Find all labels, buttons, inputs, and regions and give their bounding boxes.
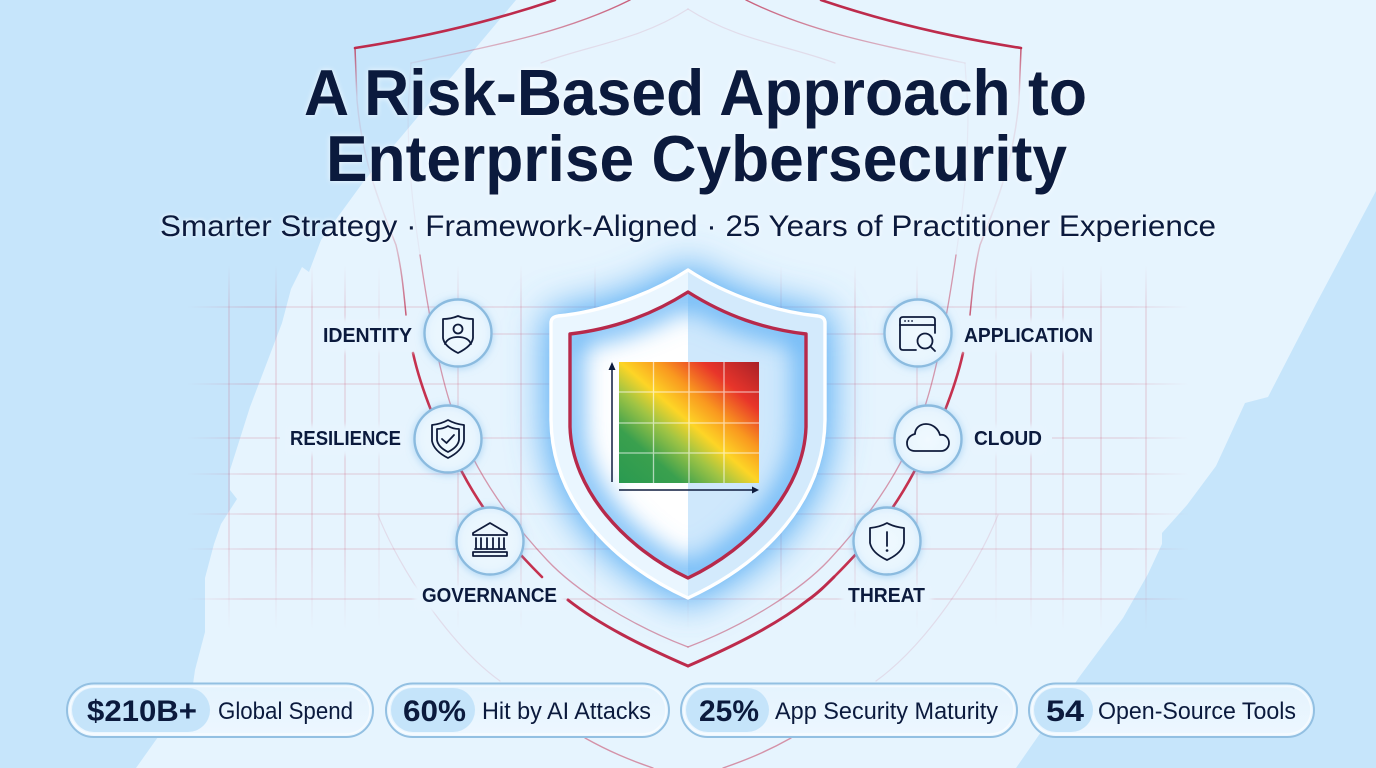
stat pill: open-source tools xyxy=(1029,684,1314,737)
stat pill: AI attacks: 60% xyxy=(403,695,466,728)
risk grid lines xyxy=(187,265,1189,640)
stat pill: app security maturity xyxy=(681,684,1017,737)
label: threat: THREAT xyxy=(848,585,925,607)
title xyxy=(304,56,1087,195)
icon: government building xyxy=(473,523,507,556)
node: cloud xyxy=(894,406,962,472)
stat pill: open-source tools: Open-Source Tools xyxy=(1098,698,1296,725)
node: governance xyxy=(456,508,524,574)
stat pill: global spend: Global Spend xyxy=(218,698,353,725)
subtitle: Smarter Strategy · Framework-Aligned · 25 Years of Practitioner Experience xyxy=(160,210,1216,243)
shield outer band xyxy=(545,265,831,605)
heatmap axes xyxy=(608,362,759,494)
stat pill: AI attacks: Hit by AI Attacks xyxy=(482,698,651,725)
shield inner panel xyxy=(565,288,811,583)
shield white edge xyxy=(551,270,825,598)
background: right blue shape xyxy=(1016,191,1376,768)
stat pill: open-source tools: 54 xyxy=(1046,695,1084,728)
node: resilience xyxy=(414,406,482,472)
stat pill: app security maturity: 25% xyxy=(699,695,759,728)
title: A Risk-Based Approach to xyxy=(304,56,1087,129)
icon: resilience shield with check xyxy=(432,420,464,458)
icon: alert shield xyxy=(870,523,904,560)
node: application xyxy=(884,300,952,366)
shield red border xyxy=(570,292,806,578)
icon: identity shield xyxy=(443,316,473,353)
icon: cloud xyxy=(907,424,949,451)
background shield outlines: left half xyxy=(355,0,688,768)
background shield outlines: right half xyxy=(688,0,1021,768)
risk heatmap xyxy=(619,362,759,483)
label: identity: IDENTITY xyxy=(323,325,413,347)
shield glow xyxy=(551,270,825,598)
stat pill: app security maturity: App Security Maturity xyxy=(775,698,998,725)
label: governance: GOVERNANCE xyxy=(422,585,557,607)
label: cloud: CLOUD xyxy=(974,428,1042,450)
stat pill: AI attacks xyxy=(386,684,669,737)
label: application: APPLICATION xyxy=(964,325,1093,347)
node: identity xyxy=(424,300,492,366)
stat pill: global spend: $210B+ xyxy=(87,695,197,728)
background: left blue shape xyxy=(0,0,516,768)
label: resilience: RESILIENCE xyxy=(290,428,401,450)
title: Enterprise Cybersecurity xyxy=(326,122,1067,195)
stat pill: global spend xyxy=(67,684,373,737)
label background halos xyxy=(285,319,1098,611)
icon: browser window with magnifier xyxy=(900,317,935,351)
central shield xyxy=(545,265,831,605)
node: threat xyxy=(854,508,920,574)
